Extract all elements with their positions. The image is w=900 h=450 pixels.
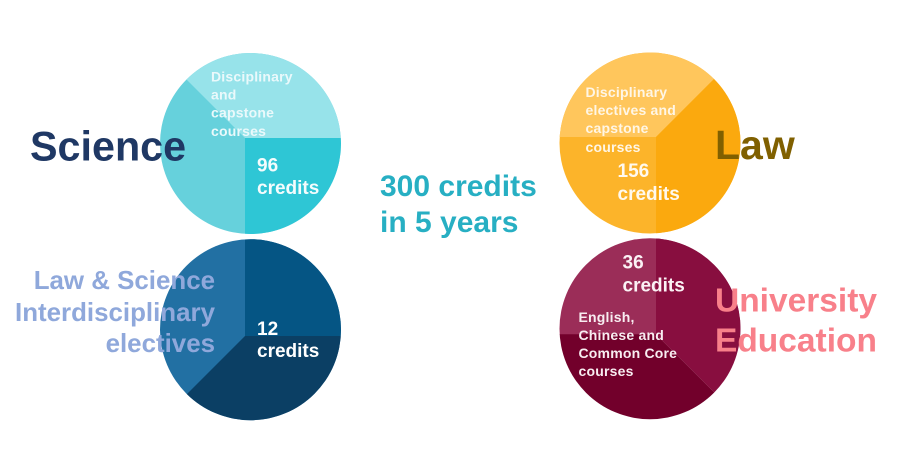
law course label: Disciplinary: [586, 84, 667, 100]
law course label: courses: [586, 139, 641, 155]
law credits: 156: [618, 161, 649, 182]
heading: Law: Law: [715, 122, 795, 168]
science course label: and: [211, 86, 236, 102]
panel: interdisciplinary pie: [160, 239, 341, 420]
science course label: capstone: [211, 104, 274, 120]
university course label: courses: [578, 363, 634, 379]
heading: Law and Science Interdisciplinary electives: Law & Science: [34, 267, 215, 295]
university credits: 36: [622, 252, 644, 274]
university course label: English,: [578, 309, 635, 325]
science credits: 96: [257, 156, 278, 177]
interdisciplinary credits: 12: [257, 319, 278, 340]
science course label: courses: [211, 123, 266, 139]
heading: University Education: Education: [715, 323, 877, 360]
heading: University Education: University: [715, 283, 877, 320]
panel: science pie: [160, 53, 341, 234]
heading: Law and Science Interdisciplinary electives: Interdisciplinary: [15, 299, 216, 327]
science course label: Disciplinary: [211, 69, 293, 85]
law course label: capstone: [586, 120, 649, 136]
heading: Law and Science Interdisciplinary electives: electives: [106, 330, 215, 358]
university credits: credits: [622, 276, 685, 296]
interdisciplinary credits: credits: [257, 341, 319, 362]
law course label: electives and: [586, 102, 676, 118]
law credits: credits: [618, 184, 680, 205]
heading: 300 credits in 5 years: in 5 years: [380, 206, 518, 239]
panel: university education pie: [560, 238, 740, 420]
university course label: Common Core: [578, 345, 677, 361]
university course label: Chinese and: [578, 327, 664, 343]
panel: law pie: [560, 52, 740, 234]
heading: Science: Science: [30, 124, 186, 170]
heading: 300 credits in 5 years: 300 credits: [380, 170, 537, 203]
science credits: credits: [257, 178, 319, 199]
